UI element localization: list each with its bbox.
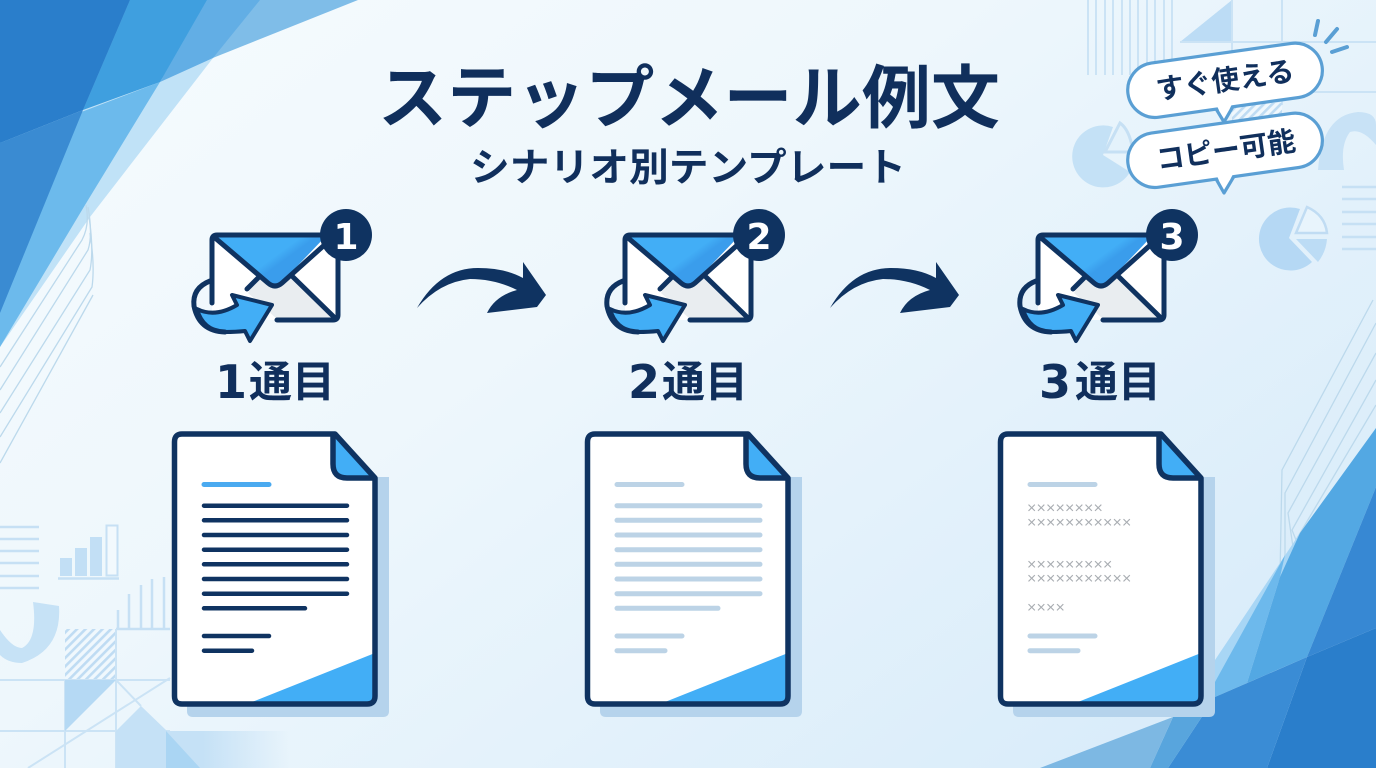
callout: すぐ使える [1124,21,1347,122]
document 1: dark text lines [174,434,389,717]
badge: 2 [733,209,785,261]
icon: reply arrow 1 [194,281,272,341]
document 3: masked text: ×××××××× [1027,500,1103,517]
badge: 2: 2 [746,217,772,258]
icon: reply arrow 3 [1020,281,1098,341]
callout: コピー可能: コピー可能 [1154,119,1298,179]
label: 3通目: 3 [1039,355,1071,409]
label: 3通目: 通目 [1075,348,1161,410]
document 3: masked text: ××××××××××× [1027,570,1132,588]
badge: 3: 3 [1159,217,1185,258]
left curved lines [0,205,93,463]
title: ステップメール例文 [378,42,1000,142]
icon: envelope 1 [194,235,338,341]
subtitle: シナリオ別テンプレート [470,137,906,193]
label: 1通目: 通目 [249,348,335,410]
bottom-right corner polygons [1040,428,1376,768]
document 2: light text lines [588,434,802,717]
document 3: masked text: ××××××××× [1027,556,1113,574]
label: 2通目: 通目 [662,348,748,410]
callout: コピー可能 [1124,110,1326,193]
top-left corner polygons [0,0,358,347]
badge: 1 [320,209,372,261]
callout: すぐ使える: すぐ使える [1153,50,1297,108]
document 3: masked text [1000,434,1215,717]
document 3: masked text: ×××× [1027,600,1065,616]
label: 2通目: 2 [628,355,660,409]
label: 1通目: 1 [215,355,247,409]
icon: reply arrow 2 [607,281,685,341]
icon: envelope 2 [607,235,751,341]
bottom-left decorative pattern [0,526,290,768]
top-right decorative pattern [1072,0,1376,271]
badge: 1: 1 [333,217,359,258]
right curved lines [1280,300,1376,577]
document 3: masked text: ××××××××××× [1027,514,1132,532]
icon: envelope 3 [1020,235,1164,341]
arrow: step 2 to 3 [830,262,959,313]
badge: 3 [1146,209,1198,261]
arrow: step 1 to 2 [417,262,546,313]
